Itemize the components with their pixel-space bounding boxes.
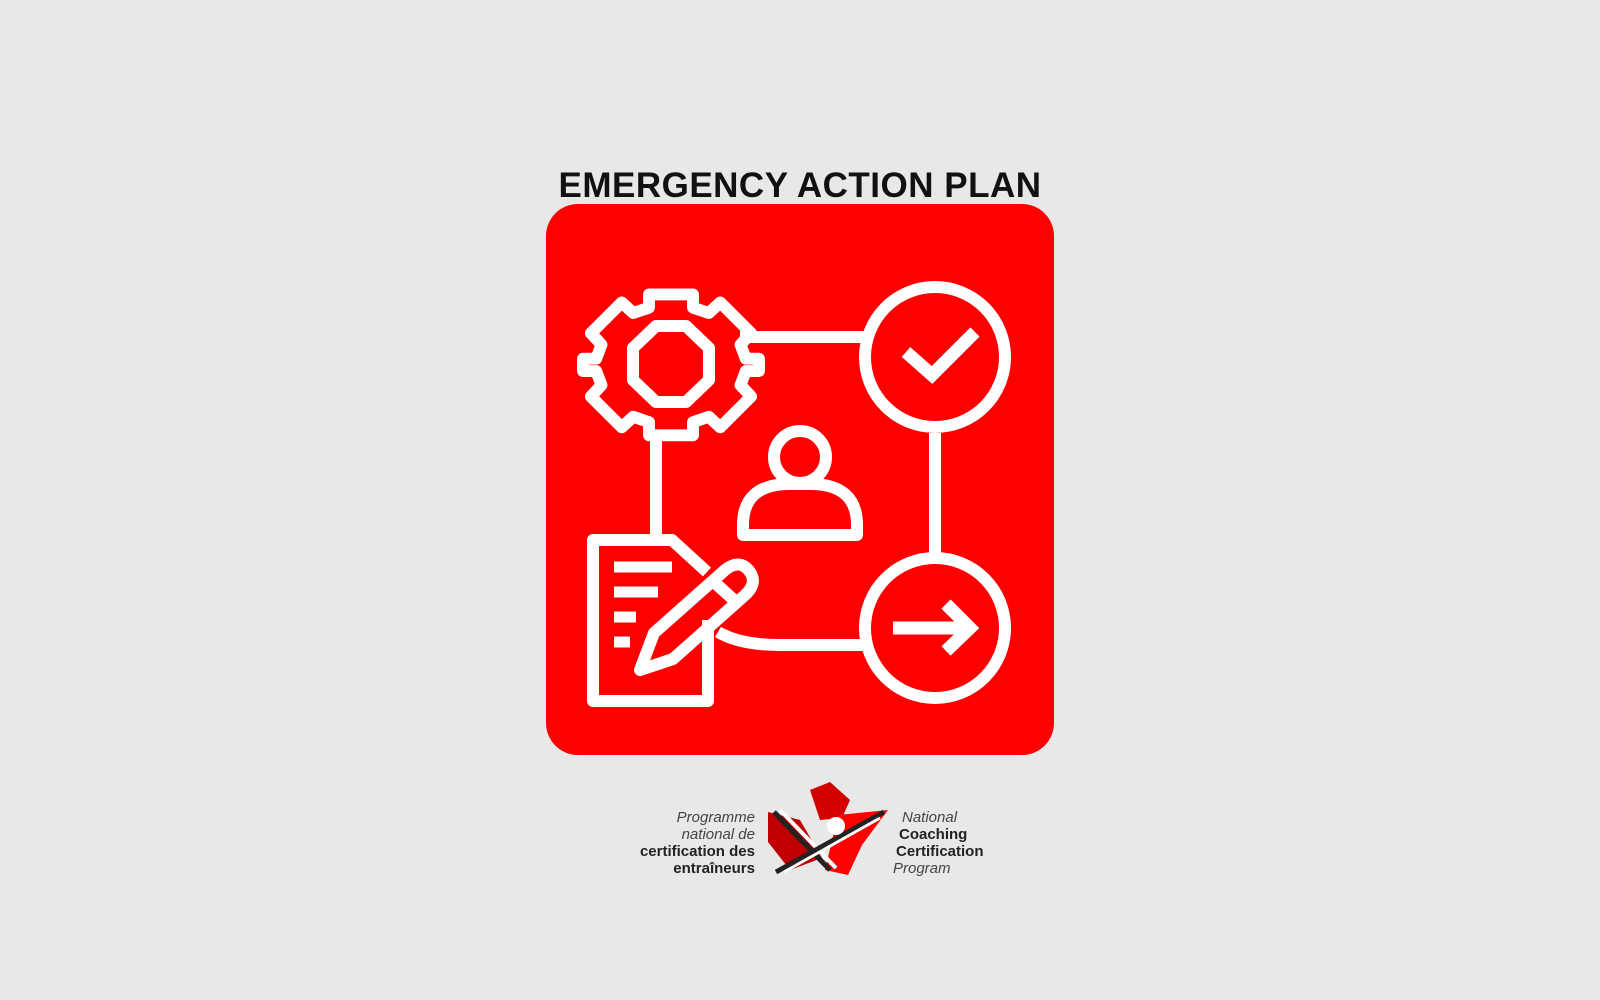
logo mark: maple leaf xyxy=(768,782,888,875)
logo text: English: National xyxy=(902,809,958,826)
logo text: French: entraîneurs xyxy=(673,860,755,877)
logo text: English: Program xyxy=(893,860,951,877)
icon: gear xyxy=(583,294,759,435)
icon: check circle xyxy=(865,287,1005,427)
title: EMERGENCY ACTION PLAN xyxy=(558,166,1042,205)
icon: arrow circle xyxy=(865,558,1005,698)
panel: red icon tile xyxy=(546,204,1054,755)
icon: connecting lines xyxy=(656,337,935,645)
logo text: French: national de xyxy=(682,826,755,843)
logo: NCCP xyxy=(640,782,984,877)
logo text: French: Programme xyxy=(677,809,755,826)
icon: document with pencil xyxy=(593,540,753,701)
logo text: French xyxy=(640,809,755,877)
logo text: English xyxy=(893,809,984,877)
logo text: French: certification des xyxy=(640,843,755,860)
icon: person xyxy=(743,431,857,535)
logo text: English: Certification xyxy=(896,843,984,860)
logo text: English: Coaching xyxy=(899,826,967,843)
